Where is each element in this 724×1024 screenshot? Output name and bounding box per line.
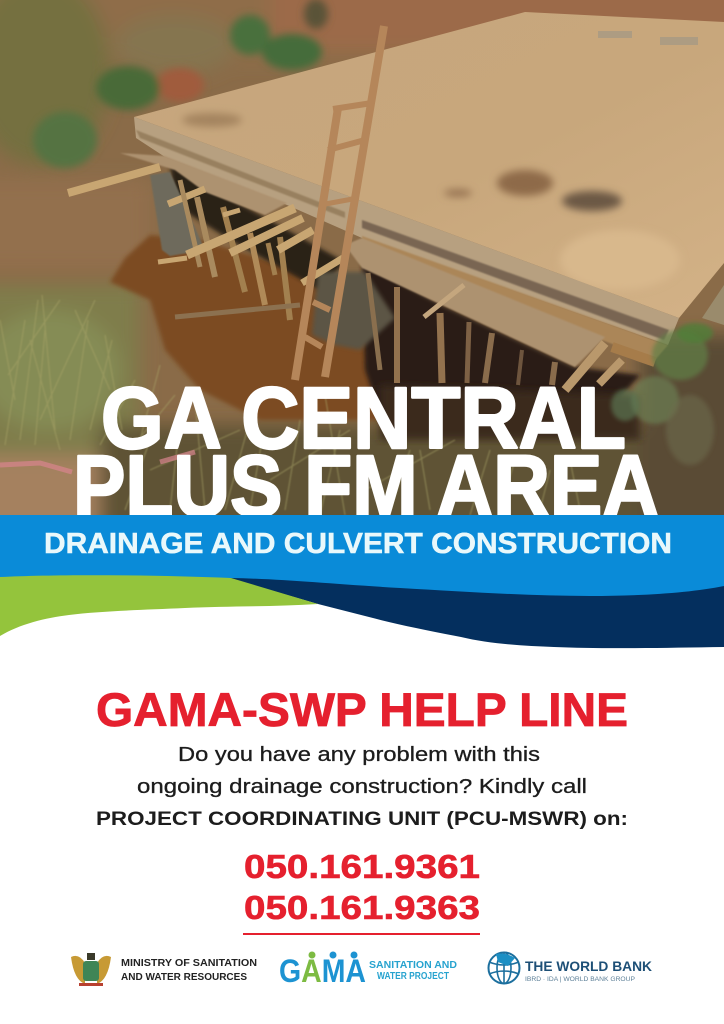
logo: GAMA sanitation and water project: GAMA [279,953,366,989]
wooden ladder [295,26,384,380]
title: GA Central Plus FM Area [77,386,658,515]
helpline instructions [96,744,628,830]
concrete pillars [150,172,205,256]
foreground grass [0,295,580,515]
soil and vegetation background [0,0,724,535]
title: GA Central Plus FM Area: PLUS FM AREA [73,438,659,535]
timber props and formwork [68,167,655,390]
helpline instructions: Do you have any problem with this [178,744,540,766]
logo: GAMA sanitation and water project [279,952,457,989]
title: GA Central Plus FM Area: GA CENTRAL [101,370,626,467]
logo: The World Bank: IBRD · IDA | WORLD BANK GROUP [525,977,635,983]
helpline heading: GAMA-SWP HELP LINE [96,683,628,736]
rough concrete overhang [120,153,605,367]
icon: Ghana coat of arms [71,953,111,986]
concrete slab top [134,12,724,318]
logo: Ministry of Sanitation [71,953,257,986]
phone numbers: 050.161.9363 [244,889,480,926]
dark void under slab [362,262,640,415]
icon: globe [488,952,520,984]
water channel [110,235,390,420]
phone numbers: 050.161.9361 [244,848,480,885]
logo: GAMA sanitation and water project: SANITATION AND [369,960,457,971]
logo: Ministry of Sanitation: MINISTRY OF SANITATION [121,957,257,969]
logo: The World Bank [488,952,652,984]
slab edge [134,117,679,345]
logo: Ministry of Sanitation: AND WATER RESOURCES [121,971,247,983]
banner subtitle: DRAINAGE AND CULVERT CONSTRUCTION [44,528,672,560]
banner: wave shapes [0,515,724,648]
helpline instructions: PROJECT COORDINATING UNIT (PCU-MSWR) on: [96,808,628,830]
photo: culvert construction site [0,0,724,535]
helpline instructions: ongoing drainage construction? Kindly call [137,776,587,798]
phone numbers [244,848,480,926]
logo: GAMA sanitation and water project: WATER PROJECT [377,971,449,982]
right foliage [611,323,714,465]
logo: The World Bank: THE WORLD BANK [525,958,652,974]
